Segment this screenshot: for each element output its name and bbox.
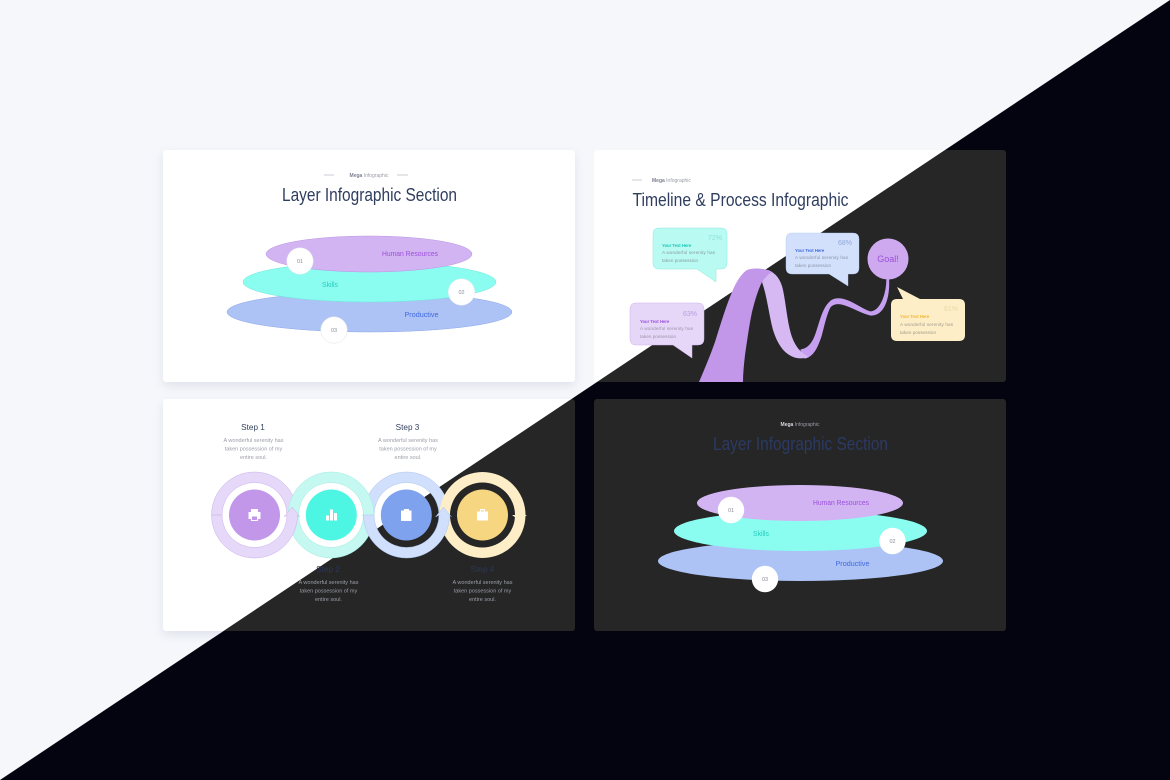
- goal circle: Goal!: [877, 254, 899, 264]
- callout: purple 63%: 63%: [683, 311, 697, 318]
- icon: bar chart: [326, 510, 337, 520]
- step 3 text: [378, 423, 438, 461]
- label: Skills: Skills: [322, 280, 338, 289]
- callout: teal 72%: [653, 228, 727, 282]
- step 4 text: entire soul.: [469, 597, 496, 603]
- label: Human Resources: Human Resources: [382, 249, 438, 258]
- callout: blue 68%: A wonderful serenity has: [795, 255, 849, 260]
- callout: teal 72%: taken possession: [662, 258, 698, 263]
- badge 02: [879, 528, 906, 554]
- ribbon: wide front: [699, 268, 772, 382]
- callout: blue 68%: Your Text Here: [795, 248, 825, 253]
- ring 3 bottom arc with arrow: [364, 507, 452, 558]
- layer: Skills: [674, 511, 927, 551]
- step 2 text: Step 2: [316, 565, 340, 574]
- label: Skills: Skills: [753, 529, 769, 538]
- panel: process steps: [212, 423, 527, 603]
- callout: teal 72%: Your Text Here: [662, 243, 692, 248]
- panel: layer infographic dark: [658, 422, 943, 592]
- step 2 text: A wonderful serenity has: [299, 580, 359, 586]
- title: Layer Infographic Section: Layer Infographic Section: [282, 185, 457, 205]
- badge 01: 01: [297, 259, 303, 265]
- badge 02: 02: [458, 290, 465, 296]
- callout: yellow 61%: taken possession: [900, 330, 936, 335]
- icon: printer: [248, 509, 260, 521]
- ring 2 top arc with arrow: [288, 472, 374, 520]
- ring 2 bottom arc: [288, 515, 374, 558]
- callout: purple 63%: A wonderful serenity has: [640, 326, 694, 331]
- callout: teal 72%: A wonderful serenity has: [662, 250, 716, 255]
- callout: teal 72%: 72%: [708, 235, 722, 242]
- panel: layer infographic light: [227, 173, 512, 343]
- eyebrow: Mega Infographic: Mega Infographic: [652, 178, 691, 184]
- interlocking rings: [212, 472, 527, 558]
- ring 4 top arc with arrow: [440, 472, 527, 520]
- badge 01: 01: [728, 508, 734, 514]
- layer: Skills: [243, 262, 496, 302]
- title: Layer Infographic Section dark: Layer Infographic Section: [713, 434, 888, 454]
- step 1 text: taken possession of my: [225, 446, 282, 452]
- step 3 text: A wonderful serenity has: [378, 438, 438, 444]
- label: Productive: Productive: [404, 310, 438, 319]
- label: Human Resources: Human Resources: [813, 498, 869, 507]
- callout: purple 63%: [630, 303, 704, 358]
- ring 3 top arc: [364, 472, 450, 515]
- step 2 text: entire soul.: [315, 597, 342, 603]
- step 1 text: Step 1: [241, 423, 265, 432]
- step 1 text: [224, 423, 284, 461]
- callout: purple 63%: Your Text Here: [640, 319, 670, 324]
- step 4 text: [453, 565, 513, 603]
- step 3 text: taken possession of my: [379, 446, 437, 452]
- step 4 text: A wonderful serenity has: [453, 580, 513, 586]
- eyebrow: Mega Infographic dark: Mega Infographic: [781, 422, 820, 428]
- badge 01: [287, 248, 313, 274]
- layer: Productive: [227, 292, 512, 332]
- ring 4 bottom arc: [440, 515, 526, 558]
- badge 03: 03: [762, 577, 768, 583]
- disc: teal chart: [306, 490, 357, 540]
- layer: Human Resources: [266, 236, 472, 272]
- icon: clipboard: [401, 509, 412, 521]
- ring 1 top arc: [212, 472, 298, 515]
- step 4 text: Step 4: [471, 565, 495, 574]
- ring 1 bottom arc with arrow: [212, 507, 300, 558]
- callout: blue 68%: [786, 233, 859, 286]
- callout: yellow 61%: [891, 287, 965, 341]
- label: Productive: Productive: [836, 559, 870, 568]
- badge 02: [448, 279, 475, 305]
- badge 03: [321, 317, 347, 343]
- callout: purple 63%: taken possession: [640, 334, 676, 339]
- step 3 text: entire soul.: [395, 455, 422, 461]
- eyebrow: Mega Infographic: Mega Infographic: [350, 173, 389, 179]
- callout: yellow 61%: Your Text Here: [900, 314, 930, 319]
- disc: purple printer: [229, 490, 280, 540]
- badge 02: 02: [889, 539, 896, 545]
- step 1 text: entire soul.: [240, 455, 267, 461]
- panel: timeline and process: [630, 178, 965, 382]
- callout: yellow 61%: 61%: [944, 306, 958, 313]
- icon: briefcase: [477, 509, 488, 520]
- ribbon: light fold: [762, 270, 809, 358]
- disc: yellow briefcase: [457, 490, 508, 540]
- badge 03: 03: [331, 328, 337, 334]
- callout: blue 68%: 68%: [838, 240, 852, 247]
- step 2 text: [299, 565, 359, 603]
- goal circle: [868, 238, 908, 280]
- step 4 text: taken possession of my: [454, 588, 511, 594]
- layer: Productive: [658, 541, 943, 581]
- step 2 text: taken possession of my: [300, 588, 357, 594]
- title: Timeline & Process Infographic: Timeline & Process Infographic: [632, 190, 848, 210]
- layer: Human Resources: [697, 485, 903, 521]
- callout: yellow 61%: A wonderful serenity has: [900, 322, 954, 327]
- badge 03: [752, 566, 778, 592]
- step 1 text: A wonderful serenity has: [224, 438, 284, 444]
- callout: blue 68%: taken possession: [795, 263, 831, 268]
- disc: blue clipboard: [381, 490, 432, 540]
- step 3 text: Step 3: [396, 423, 420, 432]
- ribbon: thin trailing section: [801, 278, 889, 358]
- badge 01: [718, 497, 744, 523]
